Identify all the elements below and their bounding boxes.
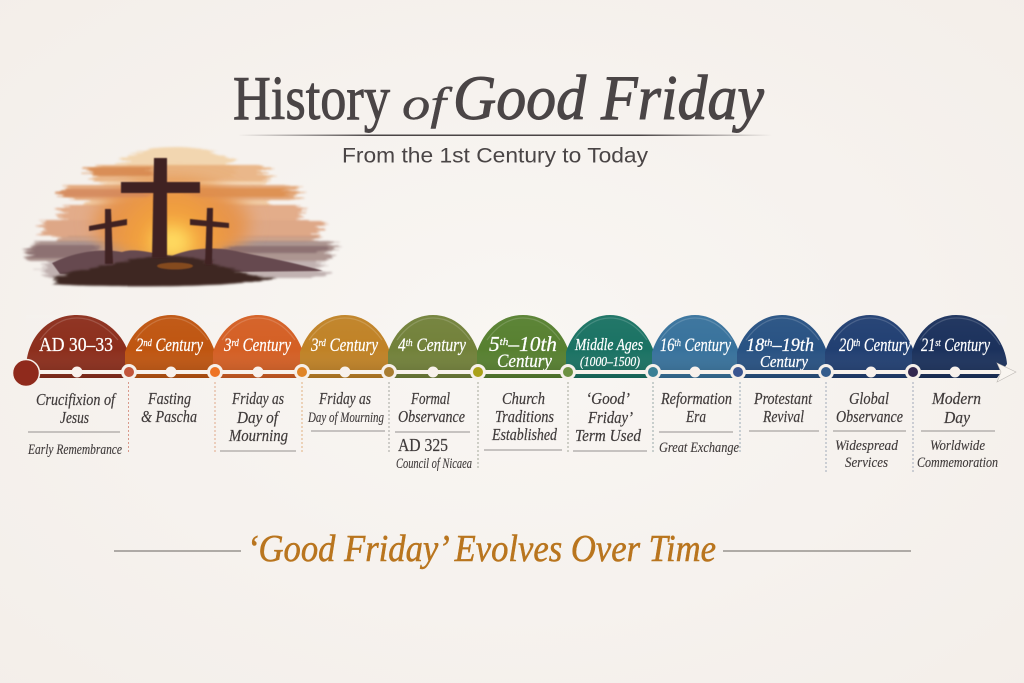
era headings: 18 — [746, 335, 765, 356]
dashed connectors — [128, 382, 913, 472]
mid dots — [72, 366, 960, 378]
era headings: Century — [760, 352, 808, 371]
era headings: th — [854, 337, 861, 349]
column: Fasting & Pascha: Fasting — [147, 389, 191, 408]
column: Modern Day: Modern — [931, 389, 981, 408]
timeline line — [26, 370, 1001, 374]
column: Crucifixion of Jesus: Crucifixion of — [36, 390, 117, 409]
era headings: Middle Ages — [574, 335, 643, 354]
era headings: 21 — [921, 335, 940, 356]
era headings: Century — [941, 335, 990, 356]
column: Protestant Revival: Revival — [762, 407, 804, 426]
column: Good Friday term used: ‘Good’ — [586, 389, 630, 408]
column: Fasting & Pascha — [141, 389, 197, 426]
era headings: nd — [143, 337, 152, 349]
era headings: rd — [319, 337, 326, 349]
column: Church Traditions Established: Traditions — [495, 407, 554, 426]
right cross — [190, 208, 229, 265]
column: Global Observance: Widespread — [835, 438, 898, 454]
era headings: th — [406, 337, 413, 349]
arrow head — [997, 363, 1016, 382]
column: Friday as Day of Mourning small: Day of Mourning — [307, 410, 384, 426]
column: Formal Observance: Council of Nicaea — [396, 456, 472, 472]
left cross — [89, 209, 127, 264]
era headings: AD 30–33 — [39, 334, 113, 356]
era headings: 2 — [136, 335, 146, 356]
era headings: 3 — [224, 335, 234, 356]
column: Crucifixion of Jesus: Jesus — [60, 408, 89, 427]
column: Friday as Day of Mourning: Friday as — [231, 389, 284, 408]
title: of — [402, 78, 454, 129]
title rule — [238, 134, 772, 136]
era headings: th — [500, 336, 509, 348]
title: History — [233, 65, 390, 133]
column: Modern Day: Day — [943, 408, 970, 427]
era headings: Century — [152, 335, 203, 356]
era headings: 4 — [398, 335, 408, 356]
era headings — [39, 332, 990, 372]
column: Global Observance: Observance — [836, 407, 903, 426]
column: Church Traditions Established: Church — [502, 389, 545, 408]
column: Crucifixion of Jesus — [27, 390, 122, 458]
era headings: –19th — [771, 335, 814, 356]
column: Crucifixion of Jesus: Early Remembrance — [27, 442, 122, 458]
era headings: (1000–1500) — [580, 355, 640, 370]
era headings: rd — [232, 337, 239, 349]
column: Friday as Day of Mourning small: Friday as — [318, 389, 371, 408]
title — [233, 62, 765, 133]
column: Church Traditions Established — [484, 389, 562, 450]
column: Global Observance — [833, 389, 906, 471]
subtitle: From the 1st Century to Today — [342, 144, 649, 168]
column: Formal Observance: AD 325 — [398, 435, 448, 455]
column: Friday as Day of Mourning — [220, 389, 296, 451]
column: Protestant Revival — [749, 389, 819, 431]
timeline — [12, 315, 1016, 472]
illustration: three crosses at sunset — [29, 147, 333, 286]
era domes — [26, 315, 1007, 378]
era headings: Century — [681, 335, 731, 356]
hills — [52, 249, 323, 274]
column: Modern Day: Commemoration — [917, 455, 998, 471]
column: Friday as Day of Mourning: Mourning — [228, 426, 288, 445]
column: Modern Day — [917, 389, 998, 471]
column: Reformation Era: Reformation — [660, 389, 732, 408]
column: Friday as Day of Mourning small — [307, 389, 385, 431]
column: Global Observance: Services — [845, 455, 888, 471]
era headings: –10th — [507, 332, 557, 356]
era headings: st — [935, 337, 941, 349]
era headings: th — [674, 337, 681, 349]
era headings: Century — [413, 335, 466, 356]
era headings: Century — [860, 335, 911, 356]
center cross — [121, 158, 200, 258]
hilltop — [56, 256, 270, 286]
era headings: Century — [326, 335, 378, 356]
column: Good Friday term used — [573, 389, 647, 451]
era headings: Century — [239, 335, 291, 356]
column: Global Observance: Global — [849, 389, 889, 408]
column: Fasting & Pascha: & Pascha — [141, 407, 197, 426]
era headings: 16 — [660, 335, 679, 356]
era headings: th — [764, 337, 773, 349]
column: Reformation Era: Era — [685, 407, 706, 426]
column: Modern Day: Worldwide — [930, 438, 985, 454]
column: Good Friday term used: Term Used — [575, 426, 641, 445]
column: Good Friday term used: Friday’ — [587, 408, 633, 427]
column: Formal Observance — [395, 389, 472, 472]
column: Church Traditions Established: Established — [491, 425, 557, 444]
column: Formal Observance: Observance — [398, 407, 465, 426]
era nodes — [12, 360, 920, 386]
column: Formal Observance: Formal — [410, 389, 450, 408]
era headings: 3 — [311, 335, 320, 356]
column: Reformation Era: Great Exchange — [659, 440, 739, 456]
title: Good Friday — [453, 62, 765, 133]
era headings: 5 — [489, 332, 500, 356]
column: Protestant Revival: Protestant — [753, 389, 813, 408]
column: Reformation Era — [659, 389, 739, 456]
column: Friday as Day of Mourning: Day of — [236, 408, 280, 427]
closing tagline: ‘Good Friday’ Evolves Over Time — [247, 528, 716, 570]
era headings: Century — [497, 351, 553, 372]
era headings: 20 — [839, 335, 858, 356]
